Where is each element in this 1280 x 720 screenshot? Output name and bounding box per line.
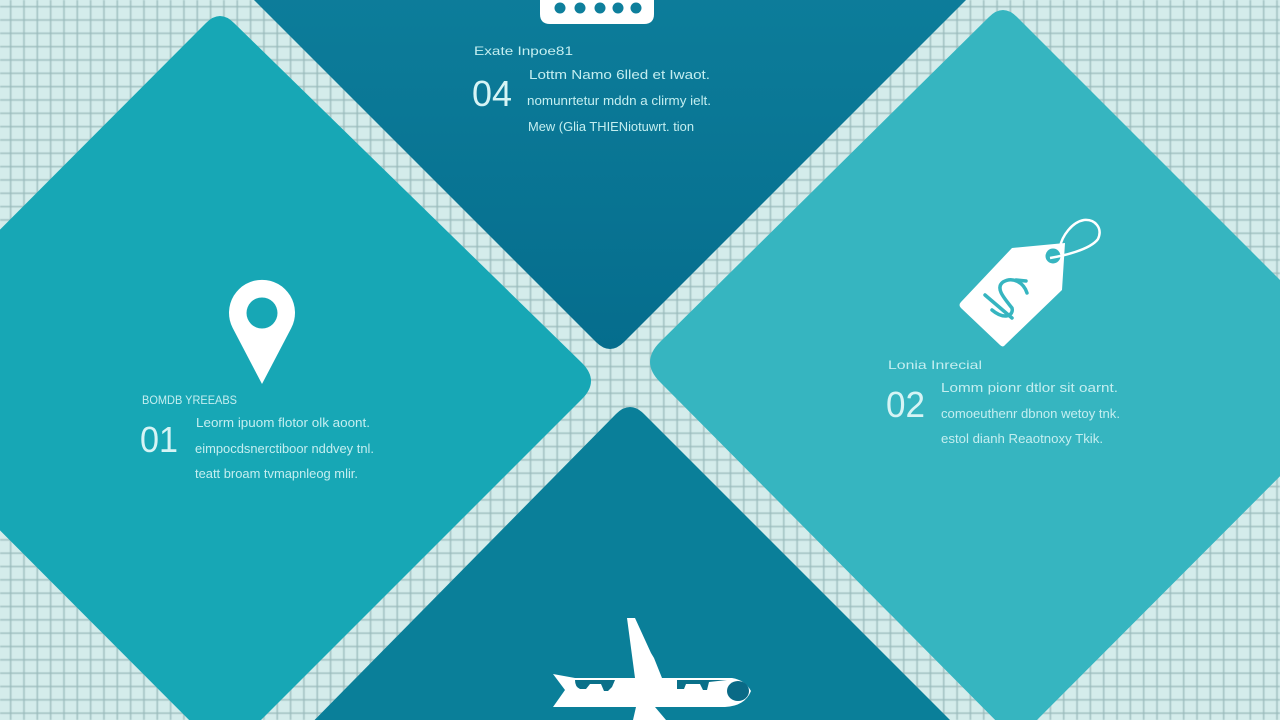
body text 01: eimpocdsnerctiboor nddvey tnl. (195, 442, 374, 456)
body text 04 (527, 68, 711, 134)
panel: diamond 03 bottom (285, 407, 980, 720)
body text 02: Lomm pionr dtlor sit oarnt. (941, 381, 1118, 395)
body text 02: comoeuthenr dbnon wetoy tnk. (941, 407, 1120, 421)
body text 01 (195, 416, 374, 481)
icon: airplane (553, 618, 751, 720)
panel: diamond 04 top (200, 0, 1020, 349)
body text 02 (941, 381, 1120, 446)
number 01: 01 (140, 419, 178, 460)
icon: price tag (960, 220, 1100, 346)
body text 04: nomunrtetur mddn a clirmy ielt. (527, 94, 711, 108)
heading 04: Exate Inpoe81 (474, 44, 573, 58)
number 02: 02 (886, 384, 925, 425)
panel: diamond 02 right (650, 10, 1280, 720)
body text 04: Mew (Glia THIENiotuwrt. tion (528, 120, 694, 134)
heading 01: BOMDB YREEABS (142, 393, 237, 407)
panel: diamond 01 left (0, 16, 591, 720)
body text 04: Lottm Namo 6lled et Iwaot. (529, 68, 710, 82)
body text 02: estol dianh Reaotnoxy Tkik. (941, 432, 1103, 446)
icon: router (540, 0, 654, 24)
heading 02: Lonia Inrecial (888, 358, 982, 372)
number 04: 04 (472, 73, 512, 114)
body text 01: Leorm ipuom flotor olk aoont. (196, 416, 370, 430)
body text 01: teatt broam tvmapnleog mlir. (195, 467, 358, 481)
icon: location pin (229, 280, 295, 384)
